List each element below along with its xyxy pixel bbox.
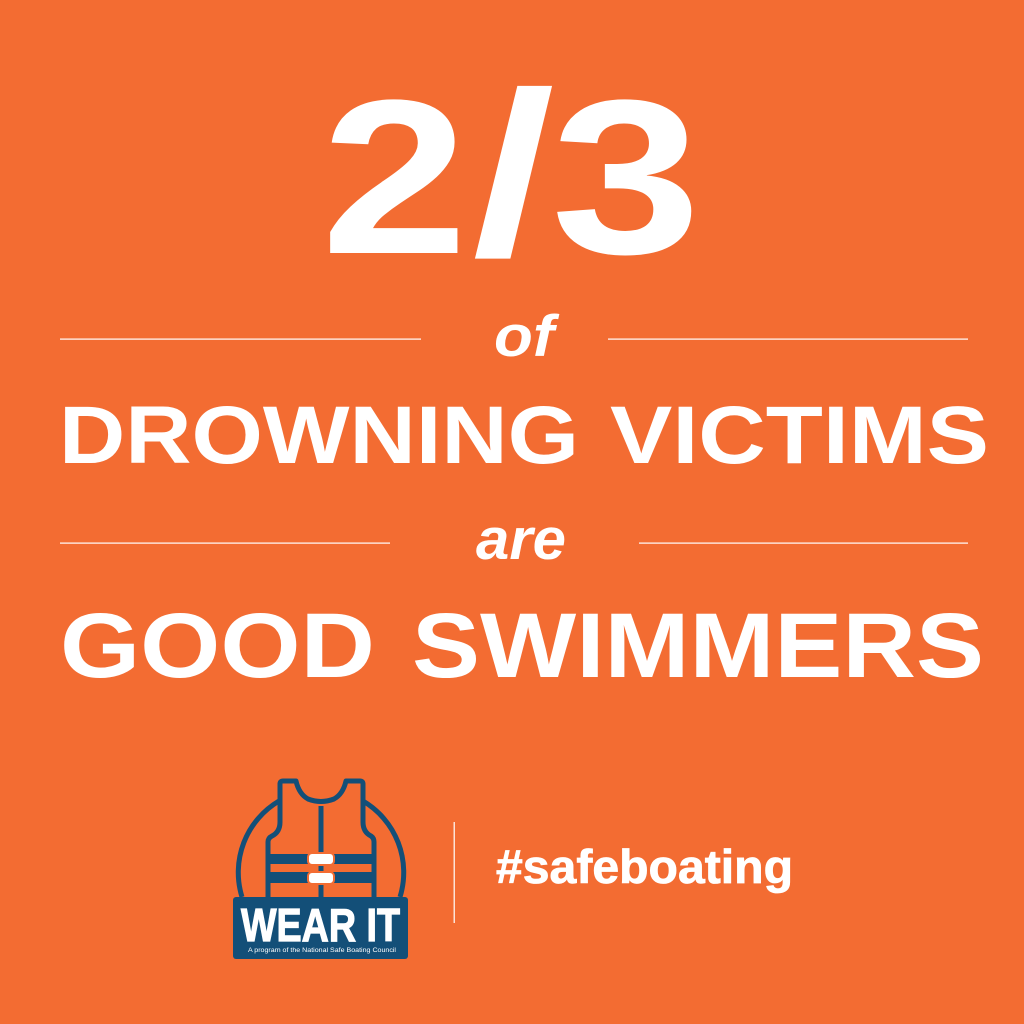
text: are: are	[476, 507, 566, 572]
icon: life vest outline	[268, 781, 374, 897]
title: 2/3 statistic: 2	[321, 54, 468, 300]
icon: arc behind vest	[238, 801, 404, 897]
logo banner	[233, 897, 408, 959]
icon: vest buckles	[308, 853, 334, 884]
title: 2/3 statistic: /	[472, 45, 555, 304]
heading: good swimmers: SWIMMERS	[412, 595, 984, 697]
hashtag: #safeboating	[496, 840, 793, 893]
logo wordmark: WEAR IT	[241, 899, 400, 951]
icon: vest straps	[268, 854, 374, 883]
heading: drowning victims: VICTIMS	[610, 390, 989, 481]
heading: drowning victims: DROWNING	[59, 390, 579, 481]
logo: Wear It life jacket	[233, 781, 408, 959]
logo tagline: A program of the National Safe Boating Council	[248, 947, 397, 954]
title: 2/3 statistic: 3	[551, 54, 701, 300]
heading: good swimmers: GOOD	[60, 595, 375, 697]
icon: vest zipper	[318, 806, 324, 897]
text: of: of	[494, 304, 560, 369]
